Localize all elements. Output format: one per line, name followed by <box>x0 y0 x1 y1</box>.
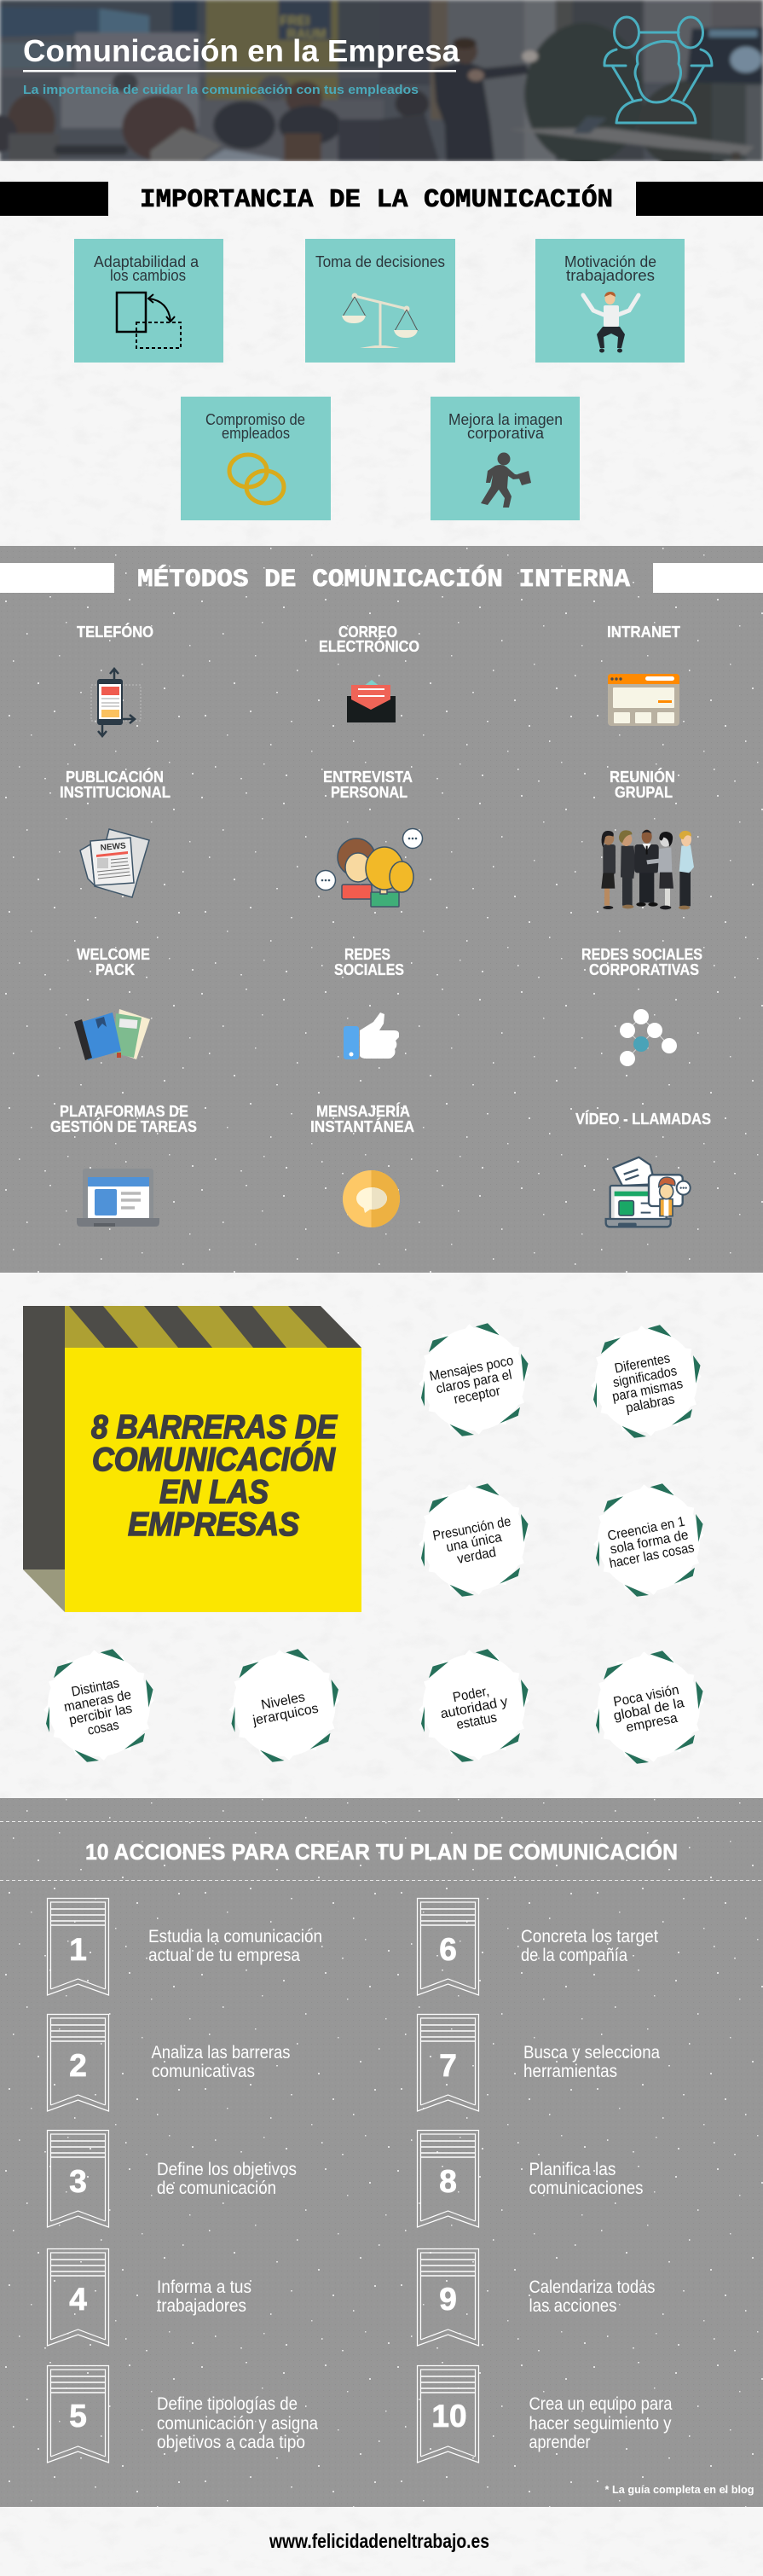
barriers heading: EMPRESAS <box>128 1506 299 1543</box>
panel: imagen corporativa <box>431 397 580 520</box>
panel: compromiso <box>181 397 331 520</box>
icon: envelope <box>347 680 396 722</box>
panel: toma de decisiones <box>305 239 455 363</box>
action 4: 4 <box>69 2282 87 2317</box>
panel: adaptabilidad: los cambios <box>110 267 186 284</box>
badge: distintas maneras <box>43 1649 154 1762</box>
badge: poder autoridad estatus: autoridad y <box>439 1695 509 1721</box>
method: reunion grupal <box>601 768 694 909</box>
method: plataformas de gestion: GESTIÓN DE TAREAS <box>50 1117 197 1135</box>
icon: jumping worker <box>583 292 639 353</box>
action 5: Define tipologías de <box>157 2394 298 2414</box>
badge: niveles jerarquicos <box>229 1649 339 1762</box>
badge: poder autoridad estatus <box>419 1649 529 1762</box>
badge: poca vision global: empresa <box>625 1711 679 1735</box>
method: reunion grupal: GRUPAL <box>615 784 673 801</box>
action 9: 9 <box>439 2282 457 2317</box>
badge: diferentes significados: para mismas <box>611 1377 684 1405</box>
barriers heading: 8 BARRERAS DE <box>91 1409 338 1446</box>
action 5: comunicación y asigna <box>157 2414 318 2434</box>
method: entrevista personal: ENTREVISTA <box>323 769 413 786</box>
action 9: Calendariza todas <box>529 2277 655 2297</box>
action 6: 6 <box>439 1932 457 1967</box>
method: redes sociales <box>334 946 404 1059</box>
method: correo electronico: CORREO <box>338 624 397 641</box>
action 10: 10 <box>431 2399 467 2434</box>
method: entrevista personal: PERSONAL <box>331 784 408 801</box>
box top face with hazard stripes <box>23 1306 361 1348</box>
action 9: las acciones <box>529 2296 617 2316</box>
panel: imagen corporativa: Mejora la imagen <box>448 411 563 428</box>
action 4: Informa a tus <box>157 2277 251 2297</box>
action 5: objetivos a cada tipo <box>157 2433 305 2452</box>
box bottom shade <box>23 1569 65 1612</box>
panel: toma de decisiones: Toma de decisiones <box>315 253 445 270</box>
icon: people network <box>604 17 712 123</box>
badge: mensajes poco claros <box>419 1323 529 1436</box>
badge: diferentes significados <box>591 1325 702 1438</box>
action 10 <box>418 2366 673 2463</box>
action 6: Concreta los target <box>521 1927 658 1947</box>
badge: mensajes poco claros: receptor <box>453 1384 502 1407</box>
hero title: Comunicación en la Empresa <box>23 33 460 68</box>
method: intranet <box>607 624 680 726</box>
hero subtitle: La importancia de cuidar la comunicación con tus empleados <box>23 83 419 97</box>
icon: newspaper: NEWS <box>100 841 126 853</box>
badge: presuncion de una unica verdad: una única <box>445 1530 503 1555</box>
method: telefono: TELEFÓNO <box>77 623 153 641</box>
action 5 <box>48 2366 318 2463</box>
method: welcome pack <box>74 946 150 1060</box>
method: correo electronico: ELECTRÓNICO <box>319 637 419 655</box>
action 7: 7 <box>439 2048 457 2083</box>
action 4: trabajadores <box>157 2296 246 2316</box>
panel: motivacion: trabajadores <box>566 267 655 284</box>
action 7: herramientas <box>523 2062 617 2081</box>
panel: adaptabilidad: Adaptabilidad a <box>94 253 199 270</box>
method: plataformas de gestion <box>50 1103 197 1227</box>
method: reunion grupal: REUNIÓN <box>610 768 675 786</box>
heading: importancia de la comunicacion <box>0 182 763 216</box>
icon: balance scale <box>342 293 418 348</box>
badge: diferentes significados: Diferentes <box>614 1351 672 1377</box>
icon: network nodes <box>620 1009 677 1066</box>
method: telefono <box>77 623 153 736</box>
hero photo: audience and presenter <box>0 0 763 171</box>
badge: presuncion de una unica verdad: Presunción de <box>431 1514 512 1544</box>
method: redes sociales: SOCIALES <box>334 961 404 978</box>
method: plataformas de gestion: PLATAFORMAS DE <box>60 1103 188 1120</box>
icon: chat bubble badge <box>343 1170 400 1227</box>
method: mensajeria instantanea: MENSAJERÍA <box>316 1102 410 1120</box>
action 8: comunicaciones <box>529 2179 643 2198</box>
action 7: Busca y selecciona <box>523 2043 660 2063</box>
hero photo: audience and presenter: RAUM <box>287 27 327 42</box>
badge: niveles jerarquicos: jerarquicos <box>251 1702 320 1728</box>
badge: distintas maneras: percibir las <box>68 1702 134 1728</box>
barriers heading: COMUNICACIÓN <box>92 1441 336 1478</box>
heading: importancia de la comunicacion: IMPORTANCIA DE LA COMUNICACIÓN <box>140 183 613 215</box>
hero photo: audience and presenter: FREI <box>280 14 309 28</box>
icon: video call laptop <box>606 1157 691 1227</box>
action 4 <box>48 2248 251 2346</box>
badge: poca vision global <box>593 1651 704 1764</box>
method: publicacion institucional: PUBLICACIÓN <box>66 768 164 786</box>
action 10: hacer seguimiento y <box>529 2414 672 2434</box>
action 8: 8 <box>439 2164 457 2199</box>
method: welcome pack: WELCOME <box>77 946 150 963</box>
badge: distintas maneras: maneras de <box>63 1688 133 1715</box>
action 6: de la compañía <box>521 1946 627 1965</box>
action 2: 2 <box>69 2048 87 2083</box>
method: publicacion institucional <box>60 768 171 897</box>
method: redes sociales corporativas: REDES SOCIALES <box>581 946 702 963</box>
badge: poca vision global: Poca visión <box>612 1683 680 1710</box>
icon: rotating rectangle <box>117 293 181 348</box>
action 10: aprender <box>529 2433 591 2452</box>
barriers heading: EN LAS <box>159 1474 269 1511</box>
icon: wedding rings <box>229 455 284 503</box>
method: entrevista personal <box>315 769 423 907</box>
panel: compromiso: empleados <box>222 425 290 442</box>
action 6 <box>418 1899 658 1995</box>
method: video llamadas: VÍDEO - LLAMADAS <box>575 1110 711 1128</box>
heading: 10 acciones: 10 ACCIONES PARA CREAR TU PLAN DE COMUNICACIÓN <box>85 1839 678 1865</box>
method: intranet: INTRANET <box>607 624 680 641</box>
method: video llamadas <box>575 1110 711 1227</box>
panel: imagen corporativa: corporativa <box>467 425 545 442</box>
action 5: 5 <box>69 2399 87 2434</box>
action 1: Estudia la comunicación <box>148 1927 322 1947</box>
icon: laptop with app <box>77 1169 159 1227</box>
action 2: Analiza las barreras <box>152 2043 290 2063</box>
action 2 <box>48 2015 290 2111</box>
panel: 10 acciones <box>0 1798 763 2507</box>
box front <box>65 1348 361 1612</box>
method: correo electronico <box>319 624 419 722</box>
icon: newspaper <box>80 829 149 897</box>
method: publicacion institucional: INSTITUCIONAL <box>60 784 171 801</box>
action 7 <box>418 2015 660 2111</box>
badge: distintas maneras: Distintas <box>70 1676 121 1700</box>
badge: poder autoridad estatus: estatus <box>455 1710 498 1732</box>
method: redes sociales: REDES <box>344 946 390 963</box>
action 3 <box>48 2131 297 2227</box>
action 1: 1 <box>69 1932 87 1967</box>
hero banner <box>0 0 763 171</box>
heading: metodos: MÉTODOS DE COMUNICACIÓN INTERNA <box>137 565 630 595</box>
badge: mensajes poco claros: Mensajes poco <box>428 1354 515 1384</box>
badge: presuncion de una unica verdad: verdad <box>456 1545 497 1567</box>
icon: browser window <box>608 674 679 726</box>
icon: group of business people <box>601 830 694 909</box>
footer url: www.felicidadeneltrabajo.es <box>269 2530 489 2552</box>
badge: niveles jerarquicos: Niveles <box>260 1690 306 1713</box>
icon: phone <box>91 669 141 736</box>
action 9 <box>418 2248 655 2346</box>
title underline <box>23 70 456 72</box>
method: redes sociales corporativas: CORPORATIVAS <box>589 961 699 978</box>
action 3: 3 <box>69 2164 87 2199</box>
icon: walking businessman <box>481 452 531 508</box>
action 10: Crea un equipo para <box>529 2394 673 2414</box>
action 8: Planifica las <box>529 2160 616 2179</box>
action 3: Define los objetivos <box>157 2160 297 2179</box>
heading: metodos <box>0 563 763 595</box>
method: mensajeria instantanea <box>310 1102 414 1227</box>
badge: presuncion de una unica verdad <box>419 1483 529 1597</box>
method: mensajeria instantanea: INSTANTÁNEA <box>310 1117 414 1135</box>
panel: compromiso: Compromiso de <box>205 411 305 428</box>
action 1: actual de tu empresa <box>148 1946 300 1965</box>
badge: diferentes significados: palabras <box>625 1392 676 1416</box>
blog footnote: * La guía completa en el blog <box>605 2483 754 2496</box>
badge: distintas maneras: cosas <box>86 1718 120 1738</box>
method: welcome pack: PACK <box>95 961 135 978</box>
action 3: de comunicación <box>157 2179 276 2198</box>
badge: mensajes poco claros: claros para el <box>435 1368 513 1396</box>
panel: metodos de comunicacion interna <box>0 546 763 1273</box>
panel: motivacion: Motivación de <box>564 253 656 270</box>
badge: diferentes significados: significados <box>612 1364 678 1390</box>
badge: creencia en 1 sola forma: hacer las cosas <box>608 1540 696 1571</box>
badge: creencia en 1 sola forma: sola forma de <box>609 1528 690 1558</box>
action 8 <box>418 2131 643 2227</box>
badge: creencia en 1 sola forma: Creencia en 1 <box>606 1515 686 1544</box>
badge: poder autoridad estatus: Poder, <box>452 1684 490 1705</box>
barriers heading <box>91 1409 338 1543</box>
panel: motivacion <box>535 239 685 363</box>
badge: poca vision global: global de la <box>612 1696 685 1724</box>
method: redes sociales corporativas <box>581 946 702 1066</box>
icon: two women talking <box>315 829 423 907</box>
panel: 8 barreras box <box>23 1306 361 1612</box>
icon: notebooks <box>74 1009 150 1060</box>
action 2: comunicativas <box>152 2062 255 2081</box>
icon: thumbs up <box>344 1012 399 1059</box>
action 1 <box>48 1899 322 1995</box>
panel: adaptabilidad <box>74 239 223 363</box>
box side face <box>23 1306 65 1569</box>
badge: creencia en 1 sola forma <box>593 1483 704 1597</box>
